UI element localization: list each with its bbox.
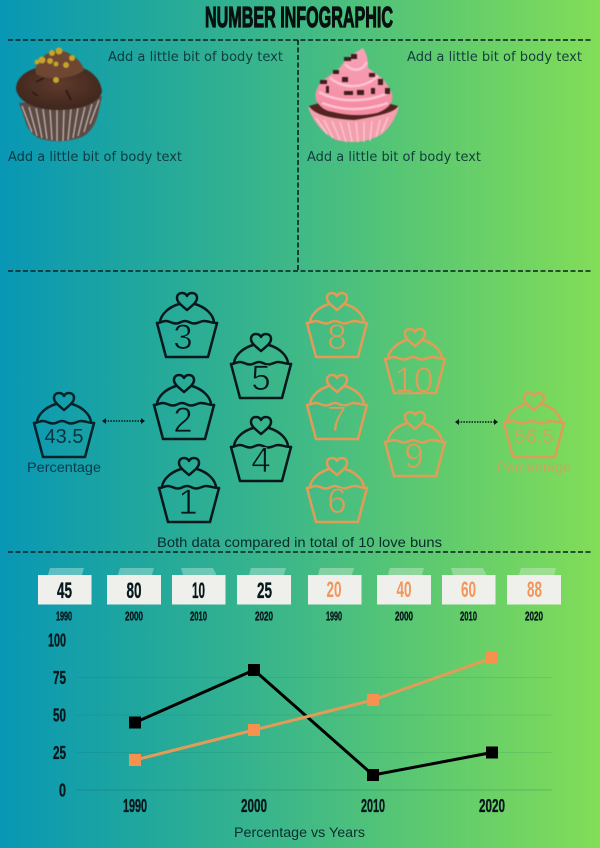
panel: black value cards: [38, 568, 291, 604]
card 25: [237, 568, 291, 604]
value: 56.5: [515, 426, 553, 448]
cupcake 4: [231, 417, 291, 481]
cupcake 10: 10: [395, 361, 433, 400]
cupcake 1: 1: [178, 483, 198, 522]
year labels under cards: [56, 610, 543, 624]
cupcake 3: [157, 293, 217, 357]
x axis labels: 1990: [123, 796, 147, 816]
cupcake 10: [385, 329, 445, 400]
card 40: [377, 568, 431, 604]
cupcake 3: 3: [173, 318, 193, 357]
panel: pink cupcake: [307, 48, 582, 165]
card 88: [507, 568, 561, 604]
y axis labels: 75: [53, 668, 66, 688]
icon: pink cupcake photo: [308, 48, 399, 142]
year labels under cards: 2010: [460, 610, 477, 624]
card 80: 80: [126, 578, 142, 603]
series: orange line: [129, 652, 498, 766]
x axis labels: 2000: [241, 796, 267, 816]
cupcake 7: [307, 375, 367, 439]
card 60: 60: [461, 577, 476, 602]
card 45: [38, 568, 92, 604]
series: black line: [129, 664, 498, 781]
cupcake 8: [307, 293, 367, 357]
card 40: 40: [396, 577, 412, 602]
text: body bottom: Add a little bit of body text: [307, 149, 481, 165]
year labels under cards: 1990: [326, 610, 342, 624]
year labels under cards: 2020: [525, 610, 543, 624]
year labels under cards: 2010: [190, 610, 207, 624]
cupcake 5: [231, 334, 291, 398]
panel: orange cupcake group: [307, 293, 445, 522]
card 25: 25: [257, 578, 272, 603]
panel: chocolate cupcake: [8, 48, 283, 165]
cupcake 6: 6: [327, 482, 347, 521]
card 60: [442, 568, 496, 604]
cupcake 2: 2: [173, 401, 193, 440]
caption: chart: Percentage vs Years: [234, 824, 365, 840]
cupcake 9: 9: [404, 437, 424, 476]
card 80: [107, 568, 161, 604]
arrow: left double-headed: [102, 418, 145, 424]
y axis labels: 0: [59, 780, 66, 800]
cupcake 8: 8: [327, 318, 347, 357]
line chart: [48, 630, 552, 816]
right percentage cupcake: [497, 393, 571, 475]
x axis labels: 2020: [479, 796, 505, 816]
card 88: 88: [527, 577, 542, 602]
year labels under cards: 2000: [395, 610, 413, 624]
year labels under cards: 1990: [56, 610, 72, 624]
label: Percentage: [497, 460, 571, 475]
cupcake 7: 7: [327, 400, 347, 439]
label: Percentage: [27, 460, 101, 475]
value: 43.5: [45, 426, 83, 448]
year labels under cards: 2000: [125, 610, 143, 624]
cupcake 2: [154, 375, 214, 440]
panel: orange value cards: [308, 568, 561, 604]
text: body top: Add a little bit of body text: [108, 49, 283, 65]
cupcake 1: [159, 458, 219, 522]
card 10: [172, 568, 226, 604]
card 20: [308, 568, 362, 604]
card 10: 10: [192, 578, 205, 603]
y axis labels: [48, 630, 66, 800]
icon: chocolate cupcake photo: [16, 48, 102, 141]
panel: black cupcake group: [154, 293, 291, 522]
card 20: 20: [326, 577, 342, 602]
card 45: 45: [57, 578, 72, 603]
y axis labels: 50: [53, 706, 66, 726]
arrow: right double-headed: [455, 419, 498, 425]
caption: comparison: Both data compared in total of 10 love buns: [157, 534, 442, 550]
text: body bottom: Add a little bit of body text: [8, 149, 182, 165]
y axis labels: 25: [53, 743, 66, 763]
y axis labels: 100: [48, 630, 66, 650]
x axis labels: [123, 796, 505, 816]
cupcake 5: 5: [251, 359, 271, 398]
left percentage cupcake: [27, 393, 101, 475]
year labels under cards: 2020: [255, 610, 273, 624]
cupcake 9: [385, 412, 445, 476]
cupcake 6: [307, 458, 367, 522]
cupcake 4: 4: [251, 441, 271, 480]
text: body top: Add a little bit of body text: [407, 49, 582, 65]
x axis labels: 2010: [361, 796, 385, 816]
title: NUMBER INFOGRAPHIC: [205, 2, 393, 34]
